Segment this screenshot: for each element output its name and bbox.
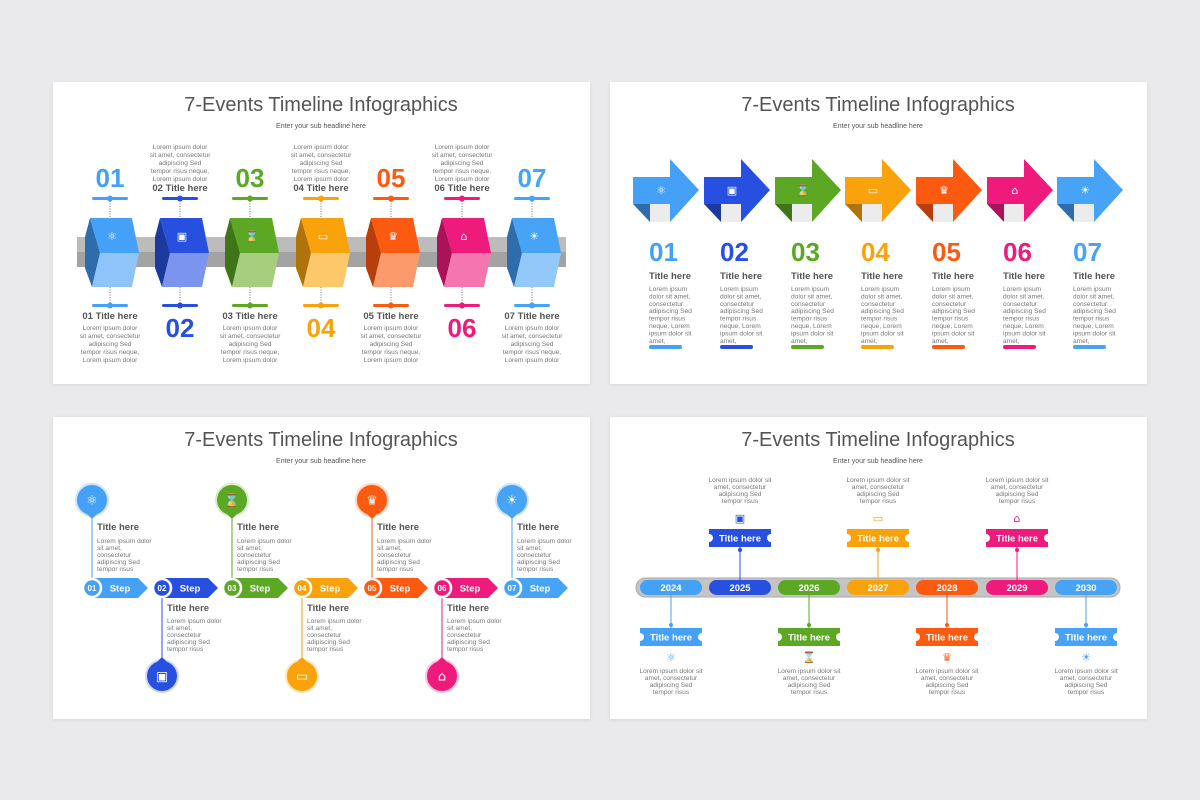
step 02: tempor risus	[167, 646, 204, 653]
event 02	[150, 144, 211, 343]
arrow 05: Title here	[932, 271, 974, 282]
year 2025: Lorem ipsum dolor sit	[708, 477, 772, 484]
arrow 02: dolor sit amet,	[720, 293, 762, 300]
arrow 02: amet,	[720, 338, 737, 345]
year 2027: adipiscing Sed	[857, 491, 900, 498]
event 03: tempor risus neque,	[221, 349, 279, 356]
year 2027: Title here	[857, 534, 899, 544]
arrow 06: ipsum dolor sit	[1003, 330, 1046, 337]
event 05: tempor risus neque,	[362, 349, 420, 356]
step 01: consectetur	[97, 552, 132, 559]
arrow 01: 01	[649, 237, 678, 267]
event 07: 07 Title here	[504, 311, 560, 322]
step 05: sit amet,	[377, 545, 402, 552]
step 07: 07	[508, 584, 517, 593]
step 07: adipiscing Sed	[517, 559, 560, 566]
arrow 07: Title here	[1073, 271, 1115, 282]
year 2024: Title here	[650, 632, 692, 644]
step 05: Lorem ipsum dolor	[377, 538, 432, 545]
event 01	[80, 163, 141, 364]
arrow 04	[845, 159, 911, 349]
year 2026: Title here	[788, 632, 830, 644]
arrow 06: ⌂	[1012, 184, 1019, 197]
arrow 06: adipiscing Sed	[1003, 308, 1046, 315]
step 07: sit amet,	[517, 545, 542, 552]
year 2025: ▣	[735, 512, 745, 525]
arrow 03: amet,	[791, 338, 808, 345]
title: 7-Events Timeline Infographics	[184, 429, 458, 451]
event 03: adipiscing Sed	[229, 341, 272, 348]
event 04: Lorem ipsum dolor	[294, 144, 348, 151]
year 2030: Title here	[1065, 632, 1107, 644]
step 05: 05	[368, 584, 377, 593]
step 03: ⌛	[224, 492, 240, 508]
event 07: Lorem ipsum dolor	[505, 325, 559, 332]
event 01: Lorem ipsum dolor	[83, 357, 138, 364]
arrow 03: consectetur	[791, 301, 826, 308]
event 01: ⚛	[107, 230, 117, 243]
step 02: adipiscing Sed	[167, 639, 210, 646]
gray bar	[77, 237, 566, 267]
arrow 02: Lorem ipsum	[720, 286, 758, 293]
year 2026: ⌛	[802, 651, 816, 664]
step 07: consectetur	[517, 552, 552, 559]
arrow 04: ipsum dolor sit	[861, 330, 904, 337]
year 2030: adipiscing Sed	[1065, 682, 1108, 689]
step 05: adipiscing Sed	[377, 559, 420, 566]
arrow 02: Title here	[720, 271, 762, 282]
year 2028	[912, 580, 982, 696]
year 2027: 2027	[867, 583, 889, 594]
arrow 07: ☀	[1080, 184, 1090, 197]
step 01: ⚛	[86, 494, 98, 508]
year 2029: ⌂	[1014, 512, 1021, 525]
arrow 07: ipsum dolor sit	[1073, 330, 1116, 337]
arrow 05: Lorem ipsum	[932, 286, 970, 293]
arrow 07: neque, Lorem	[1073, 323, 1114, 330]
step 06: tempor risus	[447, 646, 484, 653]
arrow 07	[1057, 159, 1123, 349]
arrow 07: adipiscing Sed	[1073, 308, 1116, 315]
arrow 06: neque, Lorem	[1003, 323, 1044, 330]
arrow 07: 07	[1073, 237, 1102, 267]
year 2024	[636, 580, 706, 696]
event 01: Lorem ipsum dolor	[83, 325, 137, 332]
step 01: tempor risus	[97, 566, 134, 573]
arrow 01: tempor risus	[649, 316, 686, 323]
step 02: consectetur	[167, 632, 202, 639]
step 06	[426, 578, 502, 692]
step 04: tempor risus	[307, 646, 344, 653]
arrow 05: consectetur	[932, 301, 967, 308]
arrow 05: amet,	[932, 338, 949, 345]
arrow 04: 04	[861, 237, 890, 267]
step 02: Lorem ipsum dolor	[167, 618, 222, 625]
arrow 01: Lorem ipsum	[649, 286, 687, 293]
arrow 01: neque, Lorem	[649, 323, 690, 330]
event 02: 02 Title here	[152, 183, 208, 194]
event 07: adipiscing Sed	[511, 341, 554, 348]
year 2030: ☀	[1081, 651, 1091, 664]
year 2029: Title here	[996, 534, 1038, 544]
event 02: 02	[166, 313, 194, 343]
step 01: Lorem ipsum dolor	[97, 538, 152, 545]
event 06: adipiscing Sed	[441, 160, 484, 167]
arrow 05: ♛	[939, 184, 949, 197]
arrow 05: 05	[932, 237, 961, 267]
year 2028: Title here	[926, 632, 968, 644]
event 03: Lorem ipsum dolor	[223, 325, 277, 332]
event 06: 06	[448, 313, 476, 343]
arrow 04: ▭	[868, 184, 878, 197]
step 03: Step	[250, 584, 270, 594]
arrow 01: Title here	[649, 271, 691, 282]
step 03	[216, 484, 292, 598]
event 02: Lorem ipsum dolor	[153, 144, 207, 151]
event 05: adipiscing Sed	[370, 341, 413, 348]
step 06: sit amet,	[447, 625, 472, 632]
year 2027: amet, consectetur	[852, 484, 905, 491]
subtitle: Enter your sub headline here	[833, 123, 923, 130]
year 2026	[774, 580, 844, 696]
step 03: consectetur	[237, 552, 272, 559]
step 05	[356, 484, 432, 598]
step 04: consectetur	[307, 632, 342, 639]
year 2029: amet, consectetur	[991, 484, 1044, 491]
event 06: tempor risus neque,	[433, 168, 491, 175]
step 03: Title here	[237, 522, 279, 533]
year 2025: adipiscing Sed	[719, 491, 762, 498]
arrow 05	[916, 159, 982, 349]
step 02: ▣	[156, 670, 168, 684]
event 06	[432, 144, 493, 343]
arrow 01: ⚛	[656, 184, 666, 197]
year 2026: adipiscing Sed	[788, 682, 831, 689]
event 02: Lorem ipsum dolor	[153, 176, 208, 183]
arrow 02: ipsum dolor sit	[720, 330, 763, 337]
year 2024: 2024	[660, 583, 682, 594]
year 2030: Lorem ipsum dolor sit	[1054, 668, 1118, 675]
year 2024: tempor risus	[653, 689, 690, 696]
arrow 04: tempor risus	[861, 316, 898, 323]
step 05: ♛	[366, 494, 378, 508]
year 2026: amet, consectetur	[783, 675, 836, 682]
arrow 02: ▣	[727, 184, 737, 197]
arrow 03: Title here	[791, 271, 833, 282]
arrow 06: consectetur	[1003, 301, 1038, 308]
event 07: sit amet, consectetur	[502, 333, 563, 340]
year 2024: amet, consectetur	[645, 675, 698, 682]
event 05: 05	[377, 163, 405, 193]
year 2030: 2030	[1075, 583, 1097, 594]
step 05: tempor risus	[377, 566, 414, 573]
arrow 04: dolor sit amet,	[861, 293, 903, 300]
step 05: Title here	[377, 522, 419, 533]
step 06: Lorem ipsum dolor	[447, 618, 502, 625]
subtitle: Enter your sub headline here	[833, 458, 923, 465]
arrow 05: tempor risus	[932, 316, 969, 323]
event 06: 06 Title here	[434, 183, 490, 194]
year 2028: 2028	[936, 583, 958, 594]
event 04	[291, 144, 352, 343]
event 04: 04 Title here	[293, 183, 349, 194]
year 2030	[1051, 580, 1121, 696]
event 06: Lorem ipsum dolor	[435, 144, 489, 151]
event 05: Lorem ipsum dolor	[364, 325, 418, 332]
event 03: 03	[236, 163, 264, 193]
arrow 06: tempor risus	[1003, 316, 1040, 323]
year 2029: 2029	[1006, 583, 1028, 594]
step 04: Step	[320, 584, 340, 594]
arrow 03: dolor sit amet,	[791, 293, 833, 300]
event 05: Lorem ipsum dolor	[364, 357, 419, 364]
step 04: Title here	[307, 603, 349, 614]
event 05: 05 Title here	[363, 311, 419, 322]
year 2029: Lorem ipsum dolor sit	[985, 477, 1049, 484]
event 07	[502, 163, 563, 364]
panel: slide 2 arrow timeline	[610, 82, 1147, 384]
step 07: Lorem ipsum dolor	[517, 538, 572, 545]
event 07: ☀	[529, 230, 539, 243]
step 02: Title here	[167, 603, 209, 614]
event 03: 03 Title here	[222, 311, 278, 322]
step 07: tempor risus	[517, 566, 554, 573]
year 2024: ⚛	[666, 651, 676, 664]
step 03: adipiscing Sed	[237, 559, 280, 566]
arrow 05: dolor sit amet,	[932, 293, 974, 300]
step 01: 01	[88, 584, 97, 593]
event 03: ⌛	[245, 230, 259, 243]
year 2027	[843, 477, 913, 595]
year 2026: 2026	[798, 583, 820, 594]
step 02: 02	[158, 584, 167, 593]
title: 7-Events Timeline Infographics	[741, 429, 1015, 451]
year 2030: amet, consectetur	[1060, 675, 1113, 682]
arrow 03: tempor risus	[791, 316, 828, 323]
event 06: ⌂	[461, 230, 468, 243]
subtitle: Enter your sub headline here	[276, 123, 366, 130]
event 01: tempor risus neque,	[81, 349, 139, 356]
event 03	[220, 163, 281, 364]
gray track	[636, 578, 1120, 597]
event 07: Lorem ipsum dolor	[505, 357, 560, 364]
arrow 05: ipsum dolor sit	[932, 330, 975, 337]
event 01: 01 Title here	[82, 311, 138, 322]
event 07: tempor risus neque,	[503, 349, 561, 356]
arrow 02: tempor risus	[720, 316, 757, 323]
arrow 07: tempor risus	[1073, 316, 1110, 323]
step 01: adipiscing Sed	[97, 559, 140, 566]
step 01	[76, 484, 152, 598]
year 2025: amet, consectetur	[714, 484, 767, 491]
panel: slide 1 hexagon timeline	[53, 82, 590, 384]
event 01: 01	[96, 163, 124, 193]
arrow 07: Lorem ipsum	[1073, 286, 1111, 293]
subtitle: Enter your sub headline here	[276, 458, 366, 465]
arrow 04: Title here	[861, 271, 903, 282]
arrow 02: consectetur	[720, 301, 755, 308]
arrow 06: Title here	[1003, 271, 1045, 282]
panel: slide 4 year timeline	[610, 417, 1147, 719]
year 2025	[705, 477, 775, 595]
arrow 04: consectetur	[861, 301, 896, 308]
event 01: adipiscing Sed	[89, 341, 132, 348]
arrow 02: neque, Lorem	[720, 323, 761, 330]
arrow 01: adipiscing Sed	[649, 308, 692, 315]
event 04: adipiscing Sed	[300, 160, 343, 167]
step 06: ⌂	[438, 670, 446, 684]
arrow 03: 03	[791, 237, 820, 267]
arrow 06: amet,	[1003, 338, 1020, 345]
event 04: Lorem ipsum dolor	[294, 176, 349, 183]
step 06: Step	[460, 584, 480, 594]
arrow 01	[633, 159, 699, 349]
year 2024: adipiscing Sed	[650, 682, 693, 689]
arrow 04: amet,	[861, 338, 878, 345]
year 2027: tempor risus	[860, 498, 897, 505]
arrow 02: 02	[720, 237, 749, 267]
step 01: sit amet,	[97, 545, 122, 552]
year 2025: Title here	[719, 534, 761, 544]
step 07	[496, 484, 572, 598]
step 04: sit amet,	[307, 625, 332, 632]
event 02: tempor risus neque,	[151, 168, 209, 175]
arrow 03: ⌛	[796, 184, 810, 197]
arrow 01: ipsum dolor sit	[649, 330, 692, 337]
year 2028: adipiscing Sed	[926, 682, 969, 689]
year 2029: adipiscing Sed	[996, 491, 1039, 498]
step 03: sit amet,	[237, 545, 262, 552]
year 2026: tempor risus	[791, 689, 828, 696]
step 07: Title here	[517, 522, 559, 533]
step 02	[146, 578, 222, 692]
event 07: 07	[518, 163, 546, 193]
step 03: tempor risus	[237, 566, 274, 573]
step 05: Step	[390, 584, 410, 594]
step 04: Lorem ipsum dolor	[307, 618, 362, 625]
arrow 02: adipiscing Sed	[720, 308, 763, 315]
year 2025: tempor risus	[722, 498, 759, 505]
arrow 01: dolor sit amet,	[649, 293, 691, 300]
arrow 01: amet,	[649, 338, 666, 345]
step 01: Title here	[97, 522, 139, 533]
year 2024: Lorem ipsum dolor sit	[639, 668, 703, 675]
step 04: ▭	[296, 670, 308, 684]
arrow 07: amet,	[1073, 338, 1090, 345]
year 2030: tempor risus	[1068, 689, 1105, 696]
year 2028: tempor risus	[929, 689, 966, 696]
arrow 04: Lorem ipsum	[861, 286, 899, 293]
year 2029: tempor risus	[999, 498, 1036, 505]
arrow 03	[775, 159, 841, 349]
step 06: Title here	[447, 603, 489, 614]
event 04: 04	[307, 313, 336, 343]
step 01: Step	[110, 584, 130, 594]
step 06: adipiscing Sed	[447, 639, 490, 646]
event 01: sit amet, consectetur	[80, 333, 141, 340]
year 2027: ▭	[873, 512, 883, 525]
arrow 03: ipsum dolor sit	[791, 330, 834, 337]
step 04: 04	[298, 584, 307, 593]
event 03: sit amet, consectetur	[220, 333, 281, 340]
event 04: sit amet, consectetur	[291, 152, 352, 159]
step 03: Lorem ipsum dolor	[237, 538, 292, 545]
event 02: sit amet, consectetur	[150, 152, 211, 159]
event 04: tempor risus neque,	[292, 168, 350, 175]
arrow 06	[987, 159, 1053, 349]
event 06: Lorem ipsum dolor	[435, 176, 490, 183]
year 2028: amet, consectetur	[921, 675, 974, 682]
step 02: sit amet,	[167, 625, 192, 632]
step 04	[286, 578, 362, 692]
step 06: 06	[438, 584, 447, 593]
arrow 04: adipiscing Sed	[861, 308, 904, 315]
arrow 07: consectetur	[1073, 301, 1108, 308]
year 2029	[982, 477, 1052, 595]
year 2028: ♛	[942, 651, 952, 664]
step 03: 03	[228, 584, 237, 593]
step 07: Step	[530, 584, 550, 594]
year 2026: Lorem ipsum dolor sit	[777, 668, 841, 675]
event 02: adipiscing Sed	[159, 160, 202, 167]
arrow 03: Lorem ipsum	[791, 286, 829, 293]
panel: slide 3 step pins	[53, 417, 590, 719]
event 04: ▭	[318, 230, 328, 243]
title: 7-Events Timeline Infographics	[184, 94, 458, 116]
arrow 06: Lorem ipsum	[1003, 286, 1041, 293]
event 02: ▣	[177, 230, 187, 243]
arrow 05: adipiscing Sed	[932, 308, 975, 315]
step 07: ☀	[506, 494, 518, 508]
step 02: Step	[180, 584, 200, 594]
arrow 01: consectetur	[649, 301, 684, 308]
arrow 02	[704, 159, 770, 349]
year 2028: Lorem ipsum dolor sit	[915, 668, 979, 675]
event 03: Lorem ipsum dolor	[223, 357, 278, 364]
step 04: adipiscing Sed	[307, 639, 350, 646]
arrow 04: neque, Lorem	[861, 323, 902, 330]
year 2027: Lorem ipsum dolor sit	[846, 477, 910, 484]
year 2025: 2025	[729, 583, 751, 594]
event 06: sit amet, consectetur	[432, 152, 493, 159]
arrow 03: adipiscing Sed	[791, 308, 834, 315]
title: 7-Events Timeline Infographics	[741, 94, 1015, 116]
arrow 03: neque, Lorem	[791, 323, 832, 330]
arrow 05: neque, Lorem	[932, 323, 973, 330]
event 05	[361, 163, 422, 364]
event 05: sit amet, consectetur	[361, 333, 422, 340]
arrow 07: dolor sit amet,	[1073, 293, 1115, 300]
step 05: consectetur	[377, 552, 412, 559]
arrow 06: 06	[1003, 237, 1032, 267]
event 05: ♛	[388, 230, 398, 243]
arrow 06: dolor sit amet,	[1003, 293, 1045, 300]
step 06: consectetur	[447, 632, 482, 639]
